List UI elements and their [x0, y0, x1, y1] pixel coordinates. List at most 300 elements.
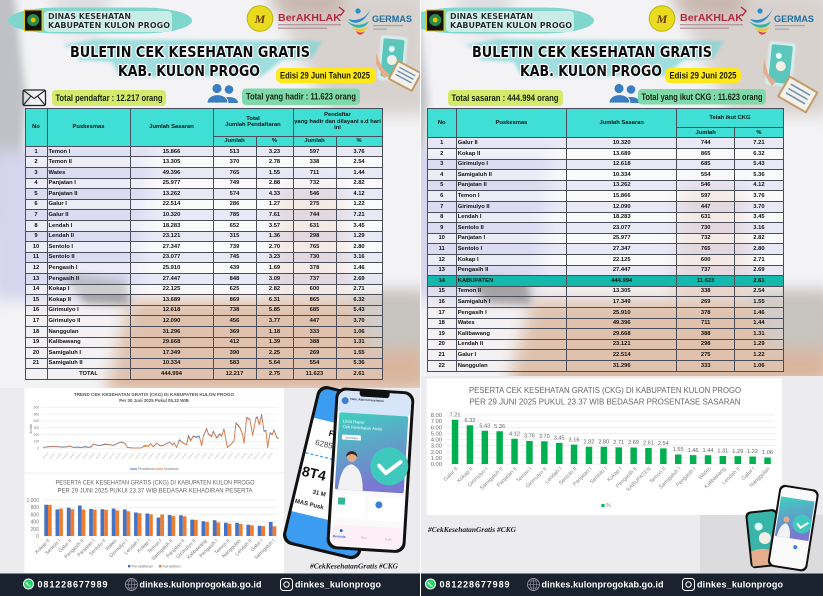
table: capaian CKG per puskesmas: 2 — [440, 151, 443, 157]
table: pendaftaran per puskesmas: 16 — [33, 307, 39, 313]
table: pendaftaran per puskesmas: 17 — [33, 318, 39, 324]
table: capaian CKG per puskesmas: 1.31 — [753, 331, 765, 337]
table: capaian CKG per puskesmas: % — [756, 130, 762, 136]
bar chart: prosentase sasaran: 7.21 — [450, 412, 460, 418]
bar chart: prosentase sasaran — [427, 378, 782, 515]
bar chart: prosentase sasaran: 1.29 — [732, 449, 743, 455]
table: pendaftaran per puskesmas: 2.75 — [269, 371, 280, 377]
table: capaian CKG per puskesmas: 6.32 — [753, 151, 765, 157]
table: capaian CKG per puskesmas: 5 — [440, 182, 443, 188]
table: pendaftaran per puskesmas: 745 — [230, 254, 239, 260]
illustration: back phone: MAS Pusk — [294, 499, 325, 512]
table: pendaftaran per puskesmas: 20 — [33, 350, 39, 356]
table: pendaftaran per puskesmas: 1 — [34, 148, 38, 154]
table: pendaftaran per puskesmas: Galur I — [48, 201, 67, 207]
table: pendaftaran per puskesmas: 275 — [310, 201, 319, 207]
bar chart: prosentase sasaran: Temon II — [649, 466, 667, 485]
table: capaian CKG per puskesmas: 5.43 — [753, 161, 765, 167]
illustration: back phone: 31 M — [312, 490, 326, 499]
bar chart: kehadiran peserta: Girimulyo I — [108, 538, 129, 559]
table: pendaftaran per puskesmas: 5.36 — [353, 360, 365, 366]
table: pendaftaran per puskesmas: 12 — [33, 265, 39, 271]
line chart: trend CKG — [29, 392, 278, 471]
line chart: trend CKG: 600 — [34, 406, 39, 410]
table: capaian CKG per puskesmas: 19 — [438, 331, 445, 337]
chart panel background — [24, 388, 284, 573]
line chart: trend CKG: 0 — [37, 446, 39, 450]
table: capaian CKG per puskesmas: 23.121 — [613, 341, 631, 347]
table: capaian CKG per puskesmas: 22.514 — [613, 352, 631, 358]
table: pendaftaran per puskesmas: 730 — [310, 254, 319, 260]
bar chart: kehadiran peserta: 400 — [31, 520, 39, 526]
table: capaian CKG per puskesmas: Sentolo I — [458, 246, 482, 252]
table: capaian CKG per puskesmas: 15 — [438, 288, 445, 294]
bar chart: kehadiran peserta: Panjatan II — [165, 538, 186, 559]
table: capaian CKG per puskesmas: 447 — [701, 204, 711, 210]
bar chart: prosentase sasaran: Pengasih II — [615, 466, 638, 489]
line chart: trend CKG: Kehadiran — [164, 467, 179, 471]
badge: edisi: Edisi 29 Juni 2025 — [670, 70, 736, 80]
table: pendaftaran per puskesmas: 1.22 — [353, 201, 365, 207]
bar chart: kehadiran peserta: Samigaluh I — [253, 538, 276, 561]
table: capaian CKG per puskesmas: 1.46 — [753, 310, 765, 316]
table: capaian CKG per puskesmas: 338 — [701, 288, 711, 294]
bar chart: kehadiran peserta: Pengasih I — [198, 538, 219, 559]
bar chart: prosentase sasaran: Temon I — [516, 466, 533, 484]
footer bar: right: dinkes.kulonprogokab.go.id — [542, 580, 664, 590]
table: pendaftaran per puskesmas: No — [32, 124, 40, 130]
table: pendaftaran per puskesmas: 5.85 — [269, 307, 280, 313]
table: pendaftaran per puskesmas: 765 — [230, 170, 239, 176]
table: pendaftaran per puskesmas: 456 — [230, 318, 239, 324]
illustration: front phone: Cek Kesehatan Anda — [342, 424, 383, 431]
table: capaian CKG per puskesmas: 13.262 — [613, 182, 631, 188]
bar chart: prosentase sasaran: Samigaluh II — [479, 466, 504, 492]
illustration: front phone — [326, 387, 415, 554]
table: capaian CKG per puskesmas: 1.06 — [753, 363, 765, 369]
logo: Melayani: M — [254, 12, 266, 26]
table: pendaftaran per puskesmas: 10.334 — [163, 360, 180, 366]
table: capaian CKG per puskesmas: 3.70 — [753, 204, 765, 210]
table: pendaftaran per puskesmas: 574 — [230, 191, 239, 197]
header pill: Dinas Kesehatan: DINAS KESEHATAN — [450, 12, 533, 21]
bar chart: kehadiran peserta: Kokap I — [136, 538, 152, 554]
table: capaian CKG per puskesmas — [427, 108, 784, 372]
bar chart: prosentase sasaran: 3.70 — [539, 434, 550, 440]
table: pendaftaran per puskesmas: 12.618 — [163, 307, 180, 313]
bar chart: kehadiran peserta: Girimulyo II — [175, 538, 197, 560]
table: pendaftaran per puskesmas: 2 — [34, 159, 38, 165]
table: capaian CKG per puskesmas: 49.396 — [613, 320, 631, 326]
table: pendaftaran per puskesmas: 1.44 — [353, 170, 365, 176]
table: pendaftaran per puskesmas: 2.70 — [269, 244, 280, 250]
table: pendaftaran per puskesmas: Jumlah Sasaran — [149, 124, 194, 130]
logo: BerAKHLAK — [680, 7, 746, 29]
table: capaian CKG per puskesmas: 444.994 — [611, 278, 632, 284]
table: pendaftaran per puskesmas: Kalibawang — [48, 339, 81, 345]
table: capaian CKG per puskesmas: Nanggulan — [458, 363, 488, 369]
bar chart: kehadiran peserta: 600 — [31, 512, 39, 518]
table: pendaftaran per puskesmas: 1.31 — [353, 339, 365, 345]
table: capaian CKG per puskesmas: 12.090 — [613, 204, 631, 210]
table: pendaftaran per puskesmas: 388 — [310, 339, 319, 345]
icon: phone and clipboard — [763, 41, 819, 114]
table: pendaftaran per puskesmas: Nanggulan — [48, 329, 78, 335]
table: capaian CKG per puskesmas: 3.76 — [753, 193, 765, 199]
table: pendaftaran per puskesmas: 1.46 — [353, 265, 365, 271]
bar chart: prosentase sasaran: 2.54 — [658, 441, 669, 447]
stat: total pendaftar: Total pendaftar : 12.217 orang — [56, 93, 163, 104]
table: pendaftaran per puskesmas: 1.69 — [269, 265, 280, 271]
table: pendaftaran per puskesmas: 3.45 — [353, 223, 365, 229]
bar chart: prosentase sasaran: 1.31 — [717, 449, 728, 455]
table: pendaftaran per puskesmas: 29.668 — [163, 339, 180, 345]
table: capaian CKG per puskesmas: 546 — [701, 182, 711, 188]
illustration: front phone: Lihat Rapor — [343, 418, 365, 425]
table: capaian CKG per puskesmas: 5.36 — [753, 172, 765, 178]
table: pendaftaran per puskesmas: 18.283 — [163, 223, 180, 229]
header pill: Dinas Kesehatan: KABUPATEN KULON PROGO — [48, 21, 171, 30]
table: pendaftaran per puskesmas: 27.447 — [163, 276, 180, 282]
bar chart: prosentase sasaran: PER 29 JUNI 2025 PUKUL 23.37 WIB BEDASAR PROSENTASE SASARAN — [470, 398, 741, 406]
table: pendaftaran per puskesmas: 269 — [310, 350, 319, 356]
table: capaian CKG per puskesmas: 16 — [438, 299, 445, 305]
table: capaian CKG per puskesmas: Girimulyo II — [458, 204, 490, 210]
table: pendaftaran per puskesmas: 17.349 — [163, 350, 180, 356]
bar chart: kehadiran peserta — [26, 480, 277, 568]
logo: GERMAS — [749, 5, 814, 35]
table: pendaftaran per puskesmas: 21 — [33, 360, 39, 366]
icon: people — [207, 84, 238, 103]
table: capaian CKG per puskesmas: 11.623 — [697, 278, 714, 284]
table: capaian CKG per puskesmas: 2.71 — [753, 257, 765, 263]
bar chart: prosentase sasaran: 6.32 — [464, 418, 475, 424]
bar chart: prosentase sasaran: 3.16 — [569, 437, 579, 443]
bar chart: prosentase sasaran: 8.00 — [431, 413, 442, 419]
table: pendaftaran per puskesmas: 5 — [34, 191, 38, 197]
table: capaian CKG per puskesmas: 865 — [701, 151, 711, 157]
illustration: back phone — [281, 384, 397, 561]
title: Buletin Cek Kesehatan Gratis: BULETIN CEK KESEHATAN GRATIS — [472, 43, 712, 61]
table: pendaftaran per puskesmas: 2.78 — [269, 159, 280, 165]
table: capaian CKG per puskesmas: Kokap II — [458, 151, 480, 157]
footer bar: right: 081228677989 — [440, 580, 510, 590]
table: capaian CKG per puskesmas: 3.45 — [753, 214, 765, 220]
table: capaian CKG per puskesmas: 4 — [440, 172, 443, 178]
bar chart: kehadiran peserta: Galur II — [58, 538, 73, 554]
table: capaian CKG per puskesmas: 1.55 — [753, 299, 765, 305]
table: capaian CKG per puskesmas: Pengasih II — [458, 267, 488, 273]
table: pendaftaran per puskesmas: 5.64 — [269, 360, 280, 366]
table: pendaftaran per puskesmas: 298 — [310, 233, 319, 239]
footer bar: right: dinkes_kulonprogo — [697, 580, 784, 590]
table: capaian CKG per puskesmas: 333 — [701, 363, 711, 369]
table: capaian CKG per puskesmas: Sentolo II — [458, 225, 484, 231]
illustration: front phone: Beranda — [333, 534, 346, 539]
title: Buletin Cek Kesehatan Gratis: KAB. KULON PROGO — [520, 62, 662, 80]
table: capaian CKG per puskesmas: 3.16 — [753, 225, 765, 231]
table: pendaftaran per puskesmas: 3.09 — [269, 276, 280, 282]
logo: Melayani — [247, 6, 273, 31]
table: pendaftaran per puskesmas: 369 — [230, 329, 239, 335]
table: capaian CKG per puskesmas: 14 — [438, 278, 445, 284]
table: pendaftaran per puskesmas — [25, 108, 383, 380]
table: pendaftaran per puskesmas: 2.69 — [353, 276, 365, 282]
table: pendaftaran per puskesmas: 1.27 — [269, 201, 280, 207]
table: pendaftaran per puskesmas: 1.06 — [353, 329, 365, 335]
bar chart: prosentase sasaran: 5.43 — [479, 424, 490, 430]
line chart: trend CKG: 300 — [34, 426, 39, 430]
table: capaian CKG per puskesmas: 12 — [438, 257, 445, 263]
table: capaian CKG per puskesmas: 600 — [701, 257, 711, 263]
table: pendaftaran per puskesmas: Kokap I — [48, 286, 69, 292]
table: pendaftaran per puskesmas: Jumlah — [224, 138, 245, 144]
table: pendaftaran per puskesmas: Girimulyo II — [48, 318, 80, 324]
table: capaian CKG per puskesmas: 17 — [438, 310, 445, 316]
table: pendaftaran per puskesmas: 3.23 — [269, 148, 280, 154]
table: pendaftaran per puskesmas: 439 — [230, 265, 239, 271]
table: pendaftaran per puskesmas: 1.29 — [353, 233, 365, 239]
table: capaian CKG per puskesmas: 631 — [701, 214, 711, 220]
line chart: trend CKG: 200 — [34, 433, 39, 437]
bar chart: kehadiran peserta: Lendah I — [123, 538, 141, 556]
table: pendaftaran per puskesmas: 18 — [33, 329, 39, 335]
table: pendaftaran per puskesmas: Panjatan I — [48, 180, 76, 186]
table: capaian CKG per puskesmas: 2.61 — [753, 278, 765, 284]
bar chart: kehadiran peserta: 1,000 — [26, 498, 39, 504]
icon: envelope — [23, 90, 46, 106]
line chart: trend CKG: 500 — [34, 412, 39, 416]
table: pendaftaran per puskesmas: 1.18 — [269, 329, 280, 335]
table: pendaftaran per puskesmas: 11 — [33, 254, 39, 260]
bar chart: prosentase sasaran: Lendah II — [721, 466, 741, 486]
table: capaian CKG per puskesmas: 737 — [701, 267, 711, 273]
table: pendaftaran per puskesmas: 732 — [310, 180, 319, 186]
table: pendaftaran per puskesmas: Jumlah Pendaftaran — [225, 122, 281, 128]
table: pendaftaran per puskesmas: 625 — [230, 286, 239, 292]
table: pendaftaran per puskesmas: 338 — [310, 159, 319, 165]
table: pendaftaran per puskesmas: 583 — [230, 360, 239, 366]
table: pendaftaran per puskesmas: 711 — [310, 170, 319, 176]
table: pendaftaran per puskesmas: 631 — [310, 223, 319, 229]
table: capaian CKG per puskesmas: 7.21 — [753, 140, 765, 146]
table: pendaftaran per puskesmas: 3.57 — [269, 223, 280, 229]
bar chart: prosentase sasaran: 0.00 — [431, 462, 442, 468]
table: pendaftaran per puskesmas: Panjatan II — [48, 191, 78, 197]
illustration: small phone with app — [767, 484, 820, 572]
table: pendaftaran per puskesmas: 370 — [230, 159, 239, 165]
badge: edisi — [276, 68, 376, 83]
table: pendaftaran per puskesmas: Pengasih II — [48, 276, 79, 282]
table: pendaftaran per puskesmas: 3.76 — [353, 148, 365, 154]
bar chart: kehadiran peserta: Galur I — [250, 538, 264, 553]
icon: phone and clipboard — [376, 35, 423, 92]
table: pendaftaran per puskesmas: 22.514 — [163, 201, 180, 207]
table: capaian CKG per puskesmas: 12.618 — [613, 161, 631, 167]
table: capaian CKG per puskesmas: 744 — [701, 140, 711, 146]
line chart: trend CKG: Pendaftaran — [138, 467, 156, 471]
table: pendaftaran per puskesmas: 749 — [230, 180, 239, 186]
table: capaian CKG per puskesmas: 1 — [440, 140, 443, 146]
table: pendaftaran per puskesmas: 27.347 — [163, 244, 180, 250]
table: pendaftaran per puskesmas: TOTAL — [79, 371, 98, 377]
table: pendaftaran per puskesmas: 7.21 — [353, 212, 365, 218]
bar chart: kehadiran peserta: PER 29 JUNI 2025 PUKUI 23.37 WIB BEDASAR KEHADIRAN PESERTA — [58, 488, 253, 494]
table: pendaftaran per puskesmas: 25.910 — [163, 265, 180, 271]
table: pendaftaran per puskesmas: 2.88 — [269, 180, 280, 186]
table: pendaftaran per puskesmas: 785 — [230, 212, 239, 218]
table: pendaftaran per puskesmas: 6.31 — [269, 297, 280, 303]
table: capaian CKG per puskesmas: 378 — [701, 310, 711, 316]
table: pendaftaran per puskesmas: 5.43 — [353, 307, 365, 313]
table: pendaftaran per puskesmas: 19 — [33, 339, 39, 345]
table: pendaftaran per puskesmas: Lendah I — [48, 223, 72, 229]
table: capaian CKG per puskesmas: 597 — [701, 193, 711, 199]
table: pendaftaran per puskesmas: 600 — [310, 286, 319, 292]
table: capaian CKG per puskesmas: 27.447 — [613, 267, 631, 273]
table: pendaftaran per puskesmas: 22.125 — [163, 286, 180, 292]
table: pendaftaran per puskesmas: 2.61 — [353, 371, 365, 377]
logo: BerAKHLAK — [278, 7, 344, 29]
table: capaian CKG per puskesmas: 9 — [440, 225, 443, 231]
bar chart: prosentase sasaran: 1.06 — [762, 450, 773, 456]
table: capaian CKG per puskesmas: 23.077 — [613, 225, 631, 231]
logo: GERMAS: GERMAS — [774, 14, 814, 25]
bar chart: kehadiran peserta: Wates — [104, 538, 119, 552]
table: capaian CKG per puskesmas: Galur II — [458, 140, 478, 146]
table: pendaftaran per puskesmas: 10.320 — [163, 212, 180, 218]
table: pendaftaran per puskesmas: 546 — [310, 191, 319, 197]
table: pendaftaran per puskesmas: 739 — [230, 244, 239, 250]
table: capaian CKG per puskesmas: 298 — [701, 341, 711, 347]
stat: total pendaftar — [52, 90, 166, 106]
table: capaian CKG per puskesmas: 29.668 — [613, 331, 631, 337]
line chart: trend CKG: Per 30 Juni 2025 Pukul 05.32 WIB — [119, 398, 189, 403]
bar chart: kehadiran peserta: Pengasih II — [63, 538, 85, 560]
bar chart: prosentase sasaran: 4.12 — [509, 432, 520, 438]
table: capaian CKG per puskesmas: 18 — [438, 320, 445, 326]
table: capaian CKG per puskesmas: Jumlah — [696, 130, 716, 136]
table: capaian CKG per puskesmas: Panjatan I — [458, 235, 485, 241]
table: pendaftaran per puskesmas: 869 — [230, 297, 239, 303]
title: Buletin Cek Kesehatan Gratis — [62, 39, 322, 80]
title: Buletin Cek Kesehatan Gratis: BULETIN CEK KESEHATAN GRATIS — [70, 43, 310, 61]
table: pendaftaran per puskesmas: 2.25 — [269, 350, 280, 356]
table: pendaftaran per puskesmas: 2.82 — [269, 286, 280, 292]
bar chart: prosentase sasaran: Girimulyo I — [467, 466, 489, 489]
table: capaian CKG per puskesmas: Temon II — [458, 288, 481, 294]
table: capaian CKG per puskesmas: Pengasih I — [458, 310, 487, 316]
table: capaian CKG per puskesmas: Kalibawang — [458, 331, 490, 337]
hashtag: #CekKesehatanGratis #CKG — [309, 562, 399, 570]
table: capaian CKG per puskesmas: Galur I — [458, 352, 476, 358]
table: pendaftaran per puskesmas: Kokap II — [48, 297, 71, 303]
bar chart: prosentase sasaran: 3.76 — [524, 434, 535, 440]
table: pendaftaran per puskesmas: Sentolo II — [48, 254, 75, 260]
bar chart: prosentase sasaran: 2.82 — [583, 439, 594, 445]
table: capaian CKG per puskesmas: 22 — [438, 363, 445, 369]
table: pendaftaran per puskesmas: 315 — [230, 233, 239, 239]
bar chart: prosentase sasaran: 2.71 — [613, 440, 624, 446]
table: pendaftaran per puskesmas: 4 — [34, 180, 38, 186]
footer bar: left: dinkes.kulonprogokab.go.id — [140, 580, 262, 590]
table: capaian CKG per puskesmas: Lendah I — [458, 214, 482, 220]
bar chart: kehadiran peserta: Panjatan I — [76, 538, 96, 558]
bar chart: prosentase sasaran: Kalibawang — [703, 466, 727, 490]
table: capaian CKG per puskesmas: Samigaluh II — [458, 172, 492, 178]
bar chart: kehadiran peserta: PESERTA CEK KESEHATAN GRATIS (CKG) DI KABUPATEN KULON PROGO — [56, 480, 254, 486]
table: capaian CKG per puskesmas: 6 — [440, 193, 443, 199]
bar chart: prosentase sasaran: Samigaluh I — [658, 466, 682, 491]
table: capaian CKG per puskesmas: 15.866 — [613, 193, 631, 199]
table: pendaftaran per puskesmas: 513 — [230, 148, 239, 154]
table: pendaftaran per puskesmas: Temon I — [48, 148, 70, 154]
illustration: back phone: 8T4 — [300, 463, 328, 484]
illustration: front phone: Fitur — [361, 536, 367, 540]
table: capaian CKG per puskesmas: Panjatan II — [458, 182, 487, 188]
table: pendaftaran per puskesmas: 13.262 — [163, 191, 180, 197]
table: capaian CKG per puskesmas: 711 — [701, 320, 710, 326]
table: capaian CKG per puskesmas: 2.69 — [753, 267, 765, 273]
table: pendaftaran per puskesmas: 2.80 — [353, 244, 365, 250]
header pill: Dinas Kesehatan: KABUPATEN KULON PROGO — [450, 21, 573, 30]
table: pendaftaran per puskesmas: 9 — [34, 233, 38, 239]
bar chart: prosentase sasaran: Galur I — [741, 466, 756, 482]
table: pendaftaran per puskesmas: 7.61 — [269, 212, 280, 218]
table: pendaftaran per puskesmas: 2.54 — [353, 159, 365, 165]
table: capaian CKG per puskesmas: 554 — [701, 172, 711, 178]
illustration: small phone with hand — [745, 509, 783, 569]
bar chart: prosentase sasaran: Nanggulan — [749, 466, 771, 489]
table: pendaftaran per puskesmas: Total — [246, 116, 260, 122]
table: pendaftaran per puskesmas: 23.121 — [163, 233, 180, 239]
table: capaian CKG per puskesmas: 20 — [438, 341, 445, 347]
logo: BerAKHLAK: BerAKHLAK — [680, 12, 743, 24]
bar chart: prosentase sasaran: 2.61 — [643, 441, 654, 447]
table: pendaftaran per puskesmas: 23.077 — [163, 254, 180, 260]
table: capaian CKG per puskesmas: 25.910 — [613, 310, 631, 316]
table: pendaftaran per puskesmas: 744 — [310, 212, 319, 218]
bar chart: prosentase sasaran: 2.00 — [431, 450, 442, 456]
table: pendaftaran per puskesmas: 31.296 — [163, 329, 180, 335]
bar chart: kehadiran peserta: Temon II — [214, 538, 231, 556]
table: pendaftaran per puskesmas: 12.090 — [163, 318, 180, 324]
bar chart: prosentase sasaran: Pengasih I — [675, 466, 697, 488]
table: capaian CKG per puskesmas: 2.54 — [753, 288, 765, 294]
bar chart: prosentase sasaran: 1.00 — [431, 456, 442, 462]
table: pendaftaran per puskesmas: Samigaluh I — [48, 350, 81, 356]
table: pendaftaran per puskesmas: 447 — [310, 318, 319, 324]
table: capaian CKG per puskesmas: Kokap I — [458, 257, 479, 263]
line chart: trend CKG: Jumlah — [29, 424, 33, 434]
table: pendaftaran per puskesmas: 4.12 — [353, 191, 365, 197]
table: capaian CKG per puskesmas: 25.977 — [613, 235, 631, 241]
table: capaian CKG per puskesmas: 4.12 — [753, 182, 765, 188]
footer bar: left: dinkes_kulonprogo — [295, 580, 382, 590]
table: capaian CKG per puskesmas: Samigaluh I — [458, 299, 490, 305]
bar chart: kehadiran peserta: Samigaluh II — [151, 538, 174, 562]
bar chart: prosentase sasaran: Lendah I — [544, 466, 563, 485]
table: pendaftaran per puskesmas: 412 — [230, 339, 239, 345]
table: pendaftaran per puskesmas: 597 — [310, 148, 319, 154]
table: capaian CKG per puskesmas: 2.82 — [753, 235, 765, 241]
table: pendaftaran per puskesmas: Jumlah — [304, 138, 325, 144]
bar chart: kehadiran peserta: 0 — [36, 534, 39, 540]
table: pendaftaran per puskesmas: Galur II — [48, 212, 68, 218]
table: capaian CKG per puskesmas: 17.349 — [613, 299, 631, 305]
table: capaian CKG per puskesmas: No — [438, 120, 446, 126]
panel: left bulletin — [0, 0, 420, 596]
